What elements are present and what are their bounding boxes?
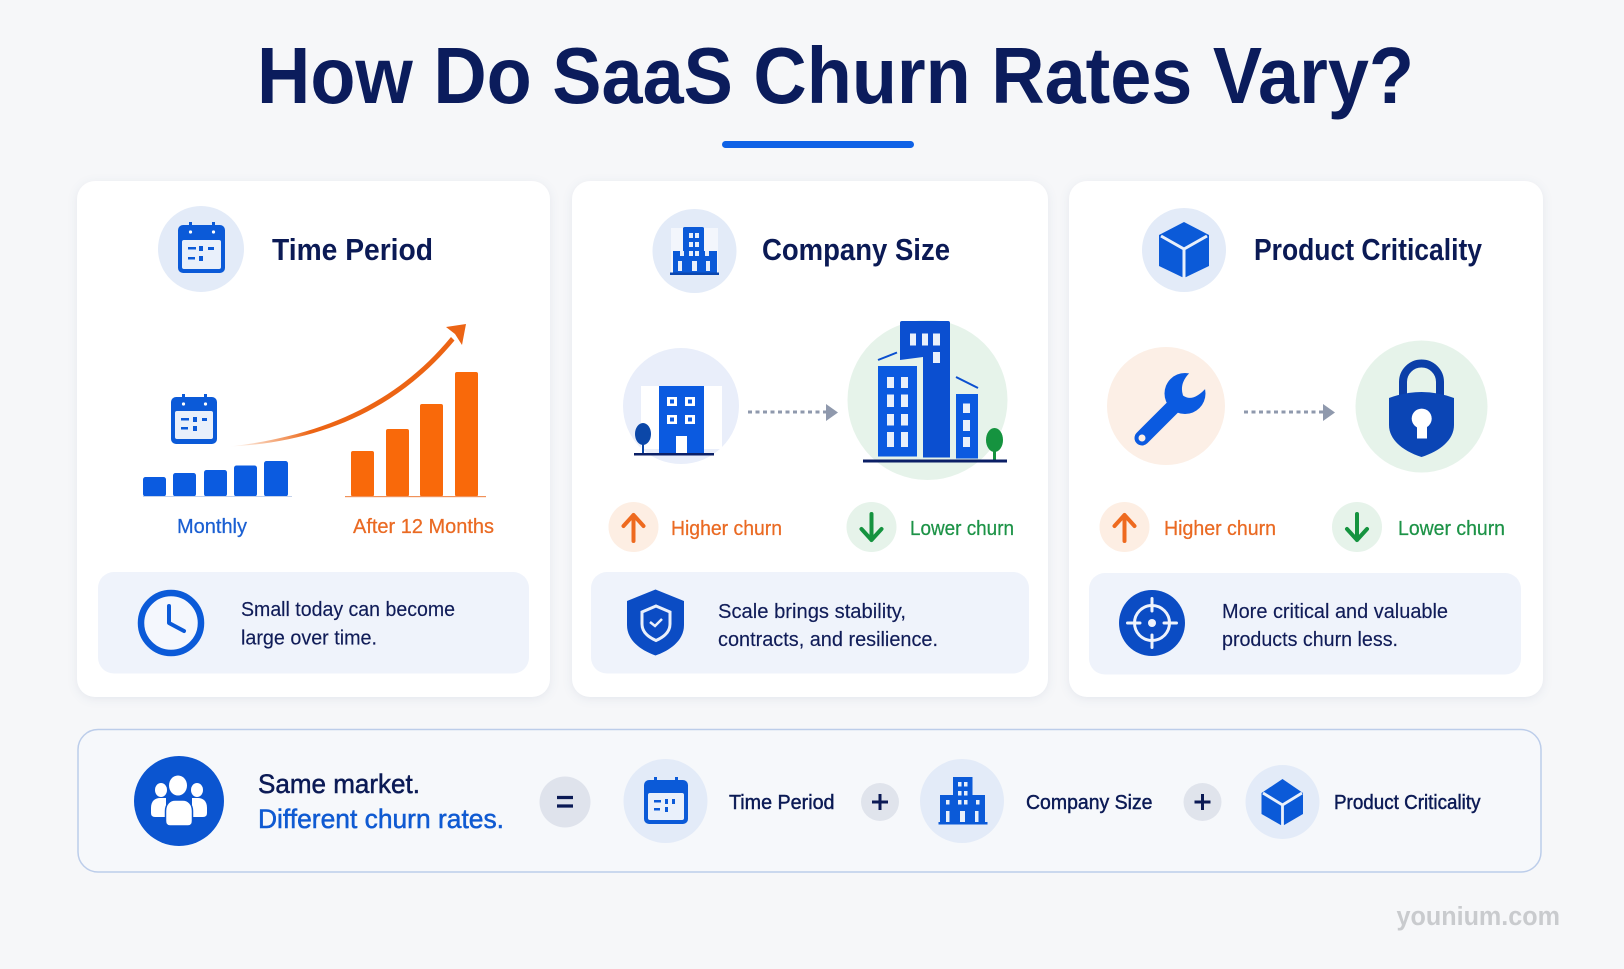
panel: summary equation [78,730,1541,872]
heading: product criticality: Product Criticality [1254,232,1483,267]
callout text: products churn less. [1222,629,1398,651]
equals sign [540,776,590,828]
arrow: growth curve [230,324,466,446]
factor: product criticality: Product Criticality [1334,791,1481,814]
callout: company size [591,572,1029,674]
icon: target [1119,590,1185,656]
label: after 12 months: After 12 Months [353,515,494,538]
callout: time period [98,572,529,674]
indicator: lower churn: Lower churn [1398,517,1505,540]
heading: company size: Company Size [762,232,950,267]
icon: small calendar [171,394,217,444]
icon: calendar header [158,206,244,292]
factor: product criticality [1246,765,1481,839]
callout text: More critical and valuable [1222,601,1448,623]
illustration: large buildings [848,320,1008,480]
factor: company size [920,759,1152,843]
callout text: Scale brings stability, [718,601,906,623]
indicator: lower churn [1332,502,1505,552]
illustration: lock [1356,340,1488,472]
label: monthly: Monthly [177,515,248,538]
watermark: younium.com [1396,903,1560,931]
panel: product criticality [1069,181,1543,697]
panel: company size [572,181,1048,697]
indicator: higher churn: Higher churn [1164,517,1276,540]
illustration: wrench [1107,347,1225,465]
summary text: Same market. [258,769,420,799]
icon: box header [1142,208,1226,292]
factor: time period [624,759,834,843]
icon: office building header [652,209,736,293]
indicator: higher churn: Higher churn [671,517,782,540]
callout text: contracts, and resilience. [718,629,938,651]
panel: time period [77,181,550,697]
heading: time period: Time Period [272,232,433,267]
callout: product criticality [1089,573,1521,674]
summary text [258,769,504,834]
indicator: higher churn [608,502,782,552]
factor: time period: Time Period [729,791,834,814]
chart: after 12 months bars [345,372,486,497]
callout text: large over time. [241,628,377,650]
summary text: Different churn rates. [258,804,504,834]
plus sign [861,783,899,821]
title: How Do SaaS Churn Rates Vary? [257,31,1414,120]
callout text: Small today can become [241,599,455,621]
icon: clock [141,593,201,653]
icon: shield [627,590,684,656]
illustration: small building [623,348,739,464]
title underline [722,141,914,148]
indicator: lower churn: Lower churn [910,517,1014,540]
indicator: higher churn [1100,502,1276,552]
arrow: dashed small to large [748,404,838,421]
factor: company size: Company Size [1026,791,1152,814]
plus sign [1184,783,1222,821]
indicator: lower churn [846,502,1014,552]
icon: people [134,756,224,846]
chart: monthly bars [143,461,292,497]
arrow: dashed wrench to lock [1244,404,1335,421]
